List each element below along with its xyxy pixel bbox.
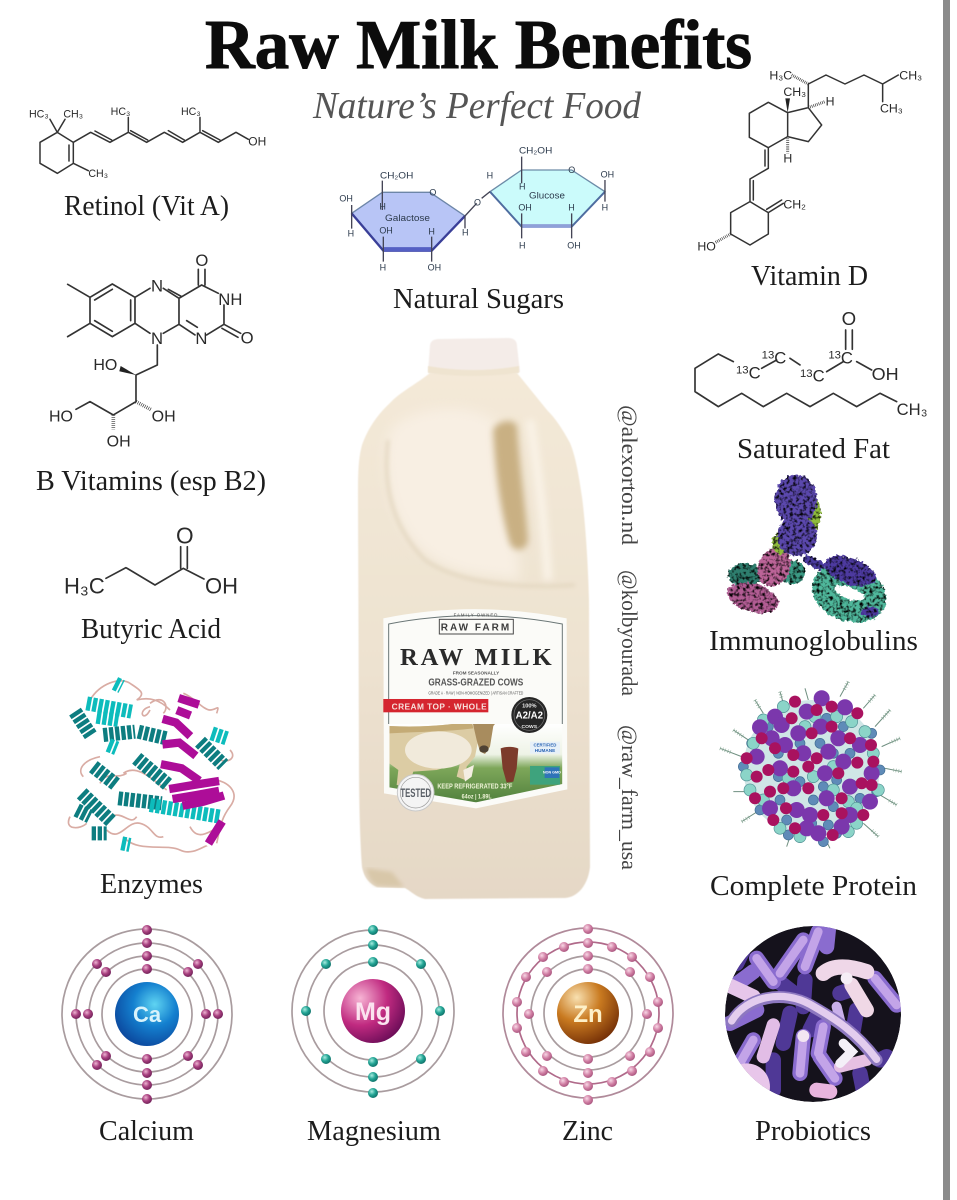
label: vitamin D: Vitamin D: [751, 261, 868, 292]
title: Raw Milk Benefits: [205, 7, 752, 84]
molecule: saturated fat: 13: [762, 350, 774, 362]
jug body: [358, 373, 590, 899]
jug handle highlight: [530, 420, 548, 580]
product label: [383, 609, 567, 811]
molecule: riboflavin: O: [195, 251, 208, 270]
molecule: vitamin D: HO: [697, 240, 716, 254]
molecule: vitamin D: [697, 68, 922, 254]
jug foot shadow: [366, 868, 404, 887]
molecule: retinol: HC₃: [29, 109, 49, 121]
molecule: lactose natural sugars: OH: [339, 193, 353, 203]
molecule: lactose natural sugars: OH: [518, 203, 532, 213]
molecule: lactose natural sugars: CH₂OH: [380, 171, 413, 181]
molecule: lactose natural sugars: H: [348, 229, 354, 239]
molecule: lactose natural sugars: H: [428, 226, 435, 236]
molecule: riboflavin: OH: [107, 434, 131, 451]
molecule: vitamin D: CH₃: [783, 85, 806, 99]
label: natural sugars: Natural Sugars: [393, 284, 564, 315]
social handle: @kolbyourada: [617, 570, 642, 696]
molecule: lactose natural sugars: OH: [567, 240, 581, 250]
molecule: riboflavin: N: [151, 277, 163, 296]
label: saturated fat: Saturated Fat: [737, 434, 890, 465]
cream top banner: CREAM TOP · WHOLE: [392, 702, 487, 712]
molecule: retinol: CH₃: [63, 109, 83, 121]
farm scene: [390, 724, 562, 802]
product descriptor: GRASS-GRAZED COWS: [428, 678, 524, 689]
molecule: lactose natural sugars: Glucose: [529, 191, 565, 201]
jug panel crease: [387, 440, 575, 586]
molecule: lactose natural sugars: OH: [428, 262, 441, 272]
molecule: vitamin D: H: [826, 94, 835, 108]
molecule: lactose natural sugars: O: [568, 165, 575, 175]
label: magnesium: Magnesium: [307, 1116, 441, 1147]
molecule: butyric acid: O: [176, 522, 194, 548]
molecule: saturated fat: C: [841, 348, 853, 367]
social handle: @raw_farm_usa: [617, 725, 642, 870]
cream top banner: [383, 699, 488, 712]
icon: enzyme ribbon: [68, 681, 234, 852]
social handle: @alexorton.nd: [617, 405, 642, 545]
molecule: riboflavin: OH: [152, 408, 176, 425]
molecule: riboflavin: HO: [93, 357, 117, 374]
certified humane logo: CERTIFIED: [534, 743, 556, 748]
subtitle: Nature’s Perfect Food: [312, 85, 642, 127]
icon: immunoglobulin antibody: [724, 475, 880, 618]
molecule: lactose natural sugars: H: [487, 170, 493, 180]
atom: magnesium: [292, 925, 454, 1098]
brand box: FAMILY OWNED: [454, 612, 498, 617]
molecule: saturated fat: OH: [872, 364, 899, 384]
molecule: lactose natural sugars: OH: [601, 169, 614, 179]
jug neck ring: [428, 366, 519, 376]
product descriptor: [428, 671, 524, 695]
milk jug: [358, 338, 590, 899]
molecule: lactose natural sugars: Galactose: [385, 213, 430, 223]
molecule: saturated fat: C: [774, 348, 786, 367]
refrigeration text: [437, 781, 513, 801]
A2/A2 badge: A2/A2: [516, 711, 543, 722]
molecule: butyric acid: [64, 522, 238, 598]
jug cap: [428, 338, 520, 375]
molecule: retinol: CH₃: [88, 168, 108, 180]
molecule: lactose natural sugars: OH: [379, 226, 393, 236]
molecule: saturated fat: CH₃: [897, 400, 927, 419]
label: B vitamins: B Vitamins (esp B2): [36, 466, 266, 497]
brand box: [439, 612, 513, 634]
label: immunoglobulins: Immunoglobulins: [709, 626, 918, 657]
molecule: retinol: OH: [248, 135, 266, 149]
jug handle recess: [493, 421, 528, 550]
molecule: lactose natural sugars: H: [519, 181, 525, 191]
molecule: butyric acid: OH: [205, 573, 238, 598]
molecule: lactose natural sugars: H: [462, 228, 468, 238]
molecule: lactose natural sugars: H: [380, 262, 386, 272]
molecule: saturated fat: [695, 308, 927, 419]
molecule: lactose natural sugars: H: [519, 240, 525, 250]
molecule: lactose natural sugars: O: [474, 198, 481, 208]
jug embossed panel: [386, 409, 520, 580]
product name: RAW MILK: [400, 644, 552, 671]
molecule: vitamin D: H₃C: [769, 68, 792, 82]
label: butyric acid: Butyric Acid: [81, 614, 221, 645]
atom: calcium: [62, 925, 232, 1104]
molecule: retinol: HC₃: [111, 106, 130, 118]
non-GMO logo: [530, 766, 561, 785]
molecule: saturated fat: O: [842, 308, 856, 329]
molecule: retinol: [29, 106, 266, 180]
label: zinc: Zinc: [562, 1116, 613, 1147]
product descriptor: GRADE A · RAW | NON-HOMOGENIZED | ARTISAN CRAFTED: [428, 690, 523, 695]
molecule: riboflavin: NH: [218, 290, 242, 309]
molecule: saturated fat: C: [749, 363, 761, 382]
non-GMO logo: NON GMO: [543, 770, 561, 774]
brand box: RAW FARM: [441, 623, 511, 634]
molecule: saturated fat: 13: [828, 350, 841, 362]
tested seal: TESTED: [400, 786, 431, 800]
molecule: lactose natural sugars: CH₂OH: [519, 145, 552, 155]
atom: calcium: Ca: [133, 1002, 162, 1027]
molecule: vitamin D: H: [783, 151, 792, 165]
certified humane logo: [530, 742, 560, 754]
molecule: lactose natural sugars: O: [429, 188, 436, 198]
refrigeration text: KEEP REFRIGERATED 33°F: [437, 781, 513, 790]
atom: zinc: Zn: [573, 1001, 603, 1028]
A2/A2 badge: COWS: [522, 724, 538, 730]
molecule: retinol: HC₃: [181, 106, 201, 118]
molecule: saturated fat: 13: [736, 365, 749, 377]
label: probiotics: Probiotics: [755, 1116, 871, 1147]
molecule: saturated fat: 13: [800, 368, 813, 380]
icon: probiotics bacteria: [723, 926, 901, 1110]
label sticker: [383, 609, 567, 808]
A2/A2 badge: 100%: [522, 703, 537, 709]
atom: zinc: [503, 924, 673, 1105]
tested seal: [397, 774, 434, 811]
molecule: butyric acid: H₃C: [64, 573, 105, 598]
molecule: riboflavin: [49, 251, 254, 451]
atom: magnesium: Mg: [355, 998, 391, 1026]
label: retinol: Retinol (Vit A): [64, 191, 229, 222]
molecule: lactose natural sugars: H: [568, 203, 575, 213]
molecule: lactose natural sugars: H: [602, 203, 608, 213]
label: complete protein: Complete Protein: [710, 871, 917, 902]
A2/A2 badge: [511, 697, 547, 733]
molecule: vitamin D: CH₂: [783, 197, 806, 211]
molecule: riboflavin: N: [195, 329, 207, 348]
molecule: vitamin D: CH₃: [899, 68, 922, 82]
refrigeration text: 64oz | 1.89L: [462, 794, 492, 801]
molecule: riboflavin: O: [241, 328, 254, 347]
certified humane logo: HUMANE: [535, 748, 555, 753]
molecule: lactose natural sugars: [339, 145, 614, 272]
molecule: vitamin D: CH₃: [880, 102, 903, 116]
label: enzymes: Enzymes: [100, 869, 203, 900]
molecule: riboflavin: HO: [49, 408, 73, 425]
molecule: lactose natural sugars: H: [379, 201, 386, 211]
icon: complete protein micelle: [720, 682, 902, 848]
molecule: riboflavin: N: [151, 329, 163, 348]
product descriptor: FROM SEASONALLY: [453, 671, 500, 676]
label: calcium: Calcium: [99, 1116, 194, 1147]
right edge bar: [943, 0, 950, 1200]
molecule: saturated fat: C: [813, 367, 825, 386]
